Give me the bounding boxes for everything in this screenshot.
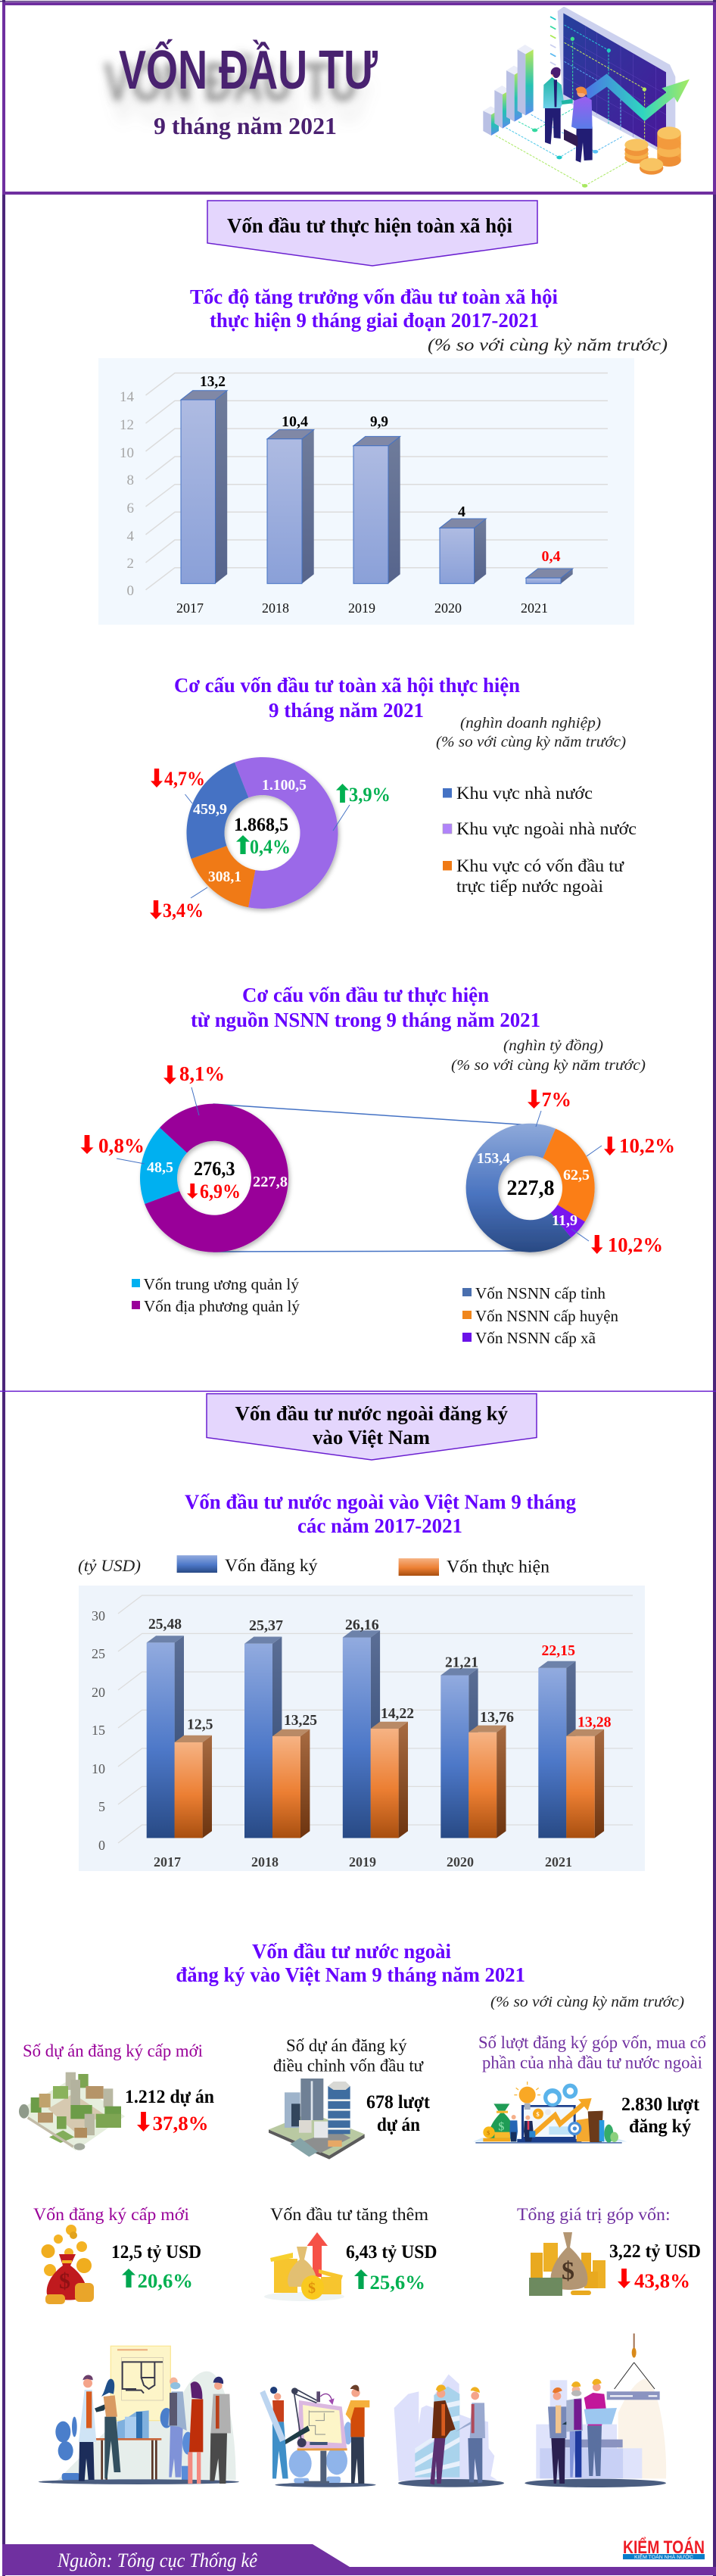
stat: adjusted projects: Số dự án đăng ký [286,2036,407,2055]
x axis years: 2018 [251,1854,279,1870]
stat: total capital contribution [517,2205,701,2296]
heading: registered foreign investment: đăng ký vào Việt Nam 9 tháng năm 2021 [176,1963,525,1986]
change: 37,8% [153,2113,209,2135]
x axis years: 2019 [349,1854,376,1870]
heading: social investment structure [174,674,520,722]
footer band [2,2544,716,2575]
x axis years: 2020 [447,1854,474,1870]
section banner: social investment [207,201,537,266]
heading: state budget structure: từ nguồn NSNN trong 9 tháng năm 2021 [191,1009,540,1031]
bar values: 13,28 [577,1714,612,1731]
x axis years: 2017 [154,1854,181,1870]
change: commune: 10,2% [608,1233,663,1256]
illustration: team reviewing plan [39,2346,239,2484]
bar chart: growth rate 2017-2021 [98,358,634,625]
bar values: 26,16 [345,1617,379,1633]
icon: coins, bag and rising arrow [264,2232,344,2301]
icon: red money bag: $ [59,2269,70,2294]
x axis years: 2019 [348,600,375,616]
value: 6,43 tỷ USD [346,2242,437,2263]
center total: 0,4% [250,836,291,858]
note: state budget units [451,1037,646,1074]
y axis labels: 2 [127,556,134,572]
y axis labels: 5 [98,1799,105,1814]
y axis labels: 12 [120,417,134,433]
icon: red money bag [41,2225,94,2304]
segment values: 227,8 [253,1174,288,1190]
note: percent comparison: (% so với cùng kỳ năm trước) [428,335,668,354]
legend: central vs local: Vốn địa phương quản lý [144,1297,300,1315]
note: units: (% so với cùng kỳ năm trước) [436,734,626,750]
x axis years: 2020 [434,600,462,616]
change: district: 10,2% [619,1134,675,1157]
heading: growth rate: Tốc độ tăng trưởng vốn đầu tư toàn xã hội [190,285,558,308]
value: đăng ký [629,2116,691,2137]
icon: city block with towers [269,2079,365,2160]
y axis labels: 0 [127,583,134,599]
x axis years: 2017 [176,600,204,616]
donut chart: investment structure [150,757,391,922]
segment values [147,1159,288,1190]
legend: local breakdown: Vốn NSNN cấp huyện [475,1307,618,1325]
stat: newly registered capital: Vốn đăng ký cấp mới [33,2205,189,2224]
x axis years [154,1854,572,1870]
donut chart: local breakdown [466,1088,675,1256]
segment values: 11,9 [552,1212,577,1229]
legend: investment structure: Khu vực nhà nước [456,784,593,803]
note: units [436,715,626,750]
section banner: foreign investment: Vốn đầu tư nước ngoài đăng ký [235,1402,508,1425]
bar values: 25,48 [148,1617,182,1633]
bars 2019 [343,1630,408,1838]
value: 3,22 tỷ USD [609,2241,701,2262]
stat: capital contribution registrations: Số lượt đăng ký góp vốn, mua cổ [478,2033,706,2052]
segment values: 62,5 [563,1167,590,1184]
value: 1.212 dự án [125,2087,214,2107]
x axis years: 2021 [521,600,548,616]
note: state budget units: (% so với cùng kỳ năm trước) [451,1057,646,1074]
heading: growth rate: thực hiện 9 tháng giai đoạn 2017-2021 [210,309,539,332]
bar values: 13,76 [480,1710,514,1726]
stat: additional investment: Vốn đầu tư tăng thêm [270,2205,428,2224]
legend: investment structure [443,784,637,896]
value: dự án [377,2115,420,2135]
bar values: 4 [458,504,465,520]
bar chart: foreign investment 2017-2021 [79,1586,645,1871]
legend: registered vs implemented: Vốn thực hiện [447,1558,550,1576]
segment values [477,1150,590,1229]
y axis labels: 4 [127,529,135,544]
y axis labels: 30 [92,1608,105,1623]
icon: business handshake in front of chart [483,7,690,188]
bar 2020 [440,519,486,584]
bar values [148,1617,612,1733]
bar values: 22,15 [542,1643,575,1659]
x axis years: 2021 [545,1854,572,1870]
segment values [193,777,307,885]
bars 2018 [244,1637,310,1838]
change [354,2269,425,2294]
x axis years [176,600,548,616]
value: 678 lượt [366,2092,431,2113]
stat: total capital contribution: Tổng giá trị góp vốn: [517,2205,671,2224]
heading: social investment structure: 9 tháng năm 2021 [269,699,424,722]
heading: social investment structure: Cơ cấu vốn đầu tư toàn xã hội thực hiện [174,674,520,697]
bar 2017 [181,391,227,584]
legend: central vs local: Vốn trung ương quản lý [144,1275,300,1293]
bar values: 0,4 [542,548,560,565]
legend: local breakdown [462,1284,618,1347]
x axis years: 2018 [262,600,289,616]
segment values: 153,4 [477,1150,510,1167]
bar values [200,373,560,565]
change: state sector: 4,7% [164,768,205,790]
bar values: 9,9 [370,413,388,430]
illustration: engineers with crane beam [525,2334,666,2487]
icon: investment growth: $ [498,2120,504,2133]
heading: growth rate [190,285,558,332]
legend: investment structure: trực tiếp nước ngoài [456,877,603,896]
change: non-state sector: 3,9% [349,784,391,806]
section banner: social investment: Vốn đầu tư thực hiện toàn xã hội [227,214,512,237]
note: percent comparison: (% so với cùng kỳ năm trước) [490,1994,684,2010]
stat: capital contribution registrations: phần của nhà đầu tư nước ngoài [482,2054,702,2072]
heading: foreign investment series [185,1491,576,1537]
bars 2017 [147,1636,212,1838]
y axis labels: 10 [120,445,134,461]
title: VỐN ĐẦU TƯ [119,39,378,101]
bar values: 13,25 [284,1713,317,1729]
change: local: 8,1% [179,1062,225,1085]
center total [187,1158,241,1202]
center total [234,815,291,858]
legend: registered vs implemented: (tỷ USD) [78,1556,141,1575]
value [366,2092,431,2135]
y axis labels [92,1608,105,1853]
bars 2020 [440,1668,506,1838]
bars 2021 [538,1661,604,1838]
legend: registered vs implemented: Vốn đăng ký [225,1556,318,1575]
change: 25,6% [369,2272,425,2294]
donut chart: central vs local [80,1062,288,1252]
change: 43,8% [634,2270,690,2292]
change [618,2269,690,2292]
bar values: 12,5 [187,1717,213,1733]
heading: foreign investment series: các năm 2017-2021 [297,1514,462,1537]
icon: investment growth: $ [487,2128,490,2136]
y axis labels: 20 [92,1685,105,1700]
bar values: 21,21 [445,1655,478,1670]
center total: 276,3 [194,1158,235,1180]
change: central: 0,8% [98,1134,145,1157]
icon: investment growth: $ [536,2110,540,2118]
bar 2019 [353,436,400,584]
bar 2018 [267,429,314,584]
stat: capital contribution registrations [473,2033,706,2144]
stat: additional investment [264,2205,437,2301]
legend: local breakdown: Vốn NSNN cấp xã [475,1329,596,1347]
legend: investment structure: Khu vực có vốn đầu tư [456,856,625,875]
stat: adjusted projects [269,2036,431,2160]
y axis labels: 14 [120,389,135,405]
stat: newly registered capital [33,2205,201,2304]
stat: new projects: Số dự án đăng ký cấp mới [23,2041,203,2060]
bar values: 13,2 [200,373,226,390]
segment values: 308,1 [208,869,241,885]
change: province [528,1088,571,1111]
icon: isometric city [19,2072,125,2150]
y axis labels: 15 [92,1723,105,1738]
segment values: 48,5 [147,1159,173,1176]
bar values: 14,22 [381,1706,414,1722]
change: 20,6% [138,2270,193,2292]
legend: registered vs implemented [78,1555,550,1576]
stat: new projects [19,2041,214,2150]
center total: 1.868,5 [234,815,288,835]
legend: central vs local [132,1275,300,1315]
illustration: handshake of engineers [394,2375,504,2487]
legend: local breakdown: Vốn NSNN cấp tỉnh [475,1284,605,1302]
heading: state budget structure: Cơ cấu vốn đầu tư thực hiện [242,984,489,1006]
header panel [4,4,714,193]
y axis labels [120,389,135,599]
heading: state budget structure [191,984,540,1031]
bar values: 25,37 [249,1618,283,1634]
value: 12,5 tỷ USD [111,2242,201,2263]
center total: 227,8 [507,1177,554,1200]
icon: coins, bag and rising arrow: $ [308,2280,316,2297]
logo: Kiem Toan: KIỂM TOÁN NHÀ NƯỚC [634,2555,694,2560]
heading: registered foreign investment [176,1940,525,1986]
y axis labels: 25 [92,1646,105,1661]
heading: registered foreign investment: Vốn đầu tư nước ngoài [252,1940,451,1963]
y axis labels: 8 [127,472,134,488]
illustration: drafting board [260,2385,376,2487]
value: 2.830 lượt [621,2094,700,2115]
change: province: 7% [542,1088,571,1111]
change: foreign sector: 3,4% [163,900,204,922]
icon: investment growth [473,2082,627,2144]
source: Nguồn: Tổng cục Thống kê [57,2549,257,2571]
connector lines between donuts [213,1104,531,1252]
legend: investment structure: Khu vực ngoài nhà nước [456,819,637,838]
bar values: 10,4 [282,413,308,430]
segment values: 1.100,5 [262,777,307,794]
bar 2021 [526,569,573,584]
segment values: 459,9 [193,801,227,818]
center total: 6,9% [200,1180,241,1202]
subtitle: 9 tháng năm 2021 [154,112,337,139]
section banner: foreign investment: vào Việt Nam [313,1427,430,1449]
y axis labels: 0 [98,1838,105,1853]
section banner: foreign investment [207,1394,537,1460]
note: state budget units: (nghìn tỷ đồng) [503,1037,603,1054]
heading: foreign investment series: Vốn đầu tư nước ngoài vào Việt Nam 9 tháng [185,1491,576,1514]
icon: money bag and gold coins [529,2232,605,2296]
stat: adjusted projects: điều chỉnh vốn đầu tư [273,2057,425,2075]
y axis labels: 6 [127,501,134,516]
note: units: (nghìn doanh nghiệp) [460,715,601,731]
value [621,2094,700,2137]
icon: money bag and gold coins: $ [562,2257,574,2285]
y axis labels: 10 [92,1761,105,1776]
